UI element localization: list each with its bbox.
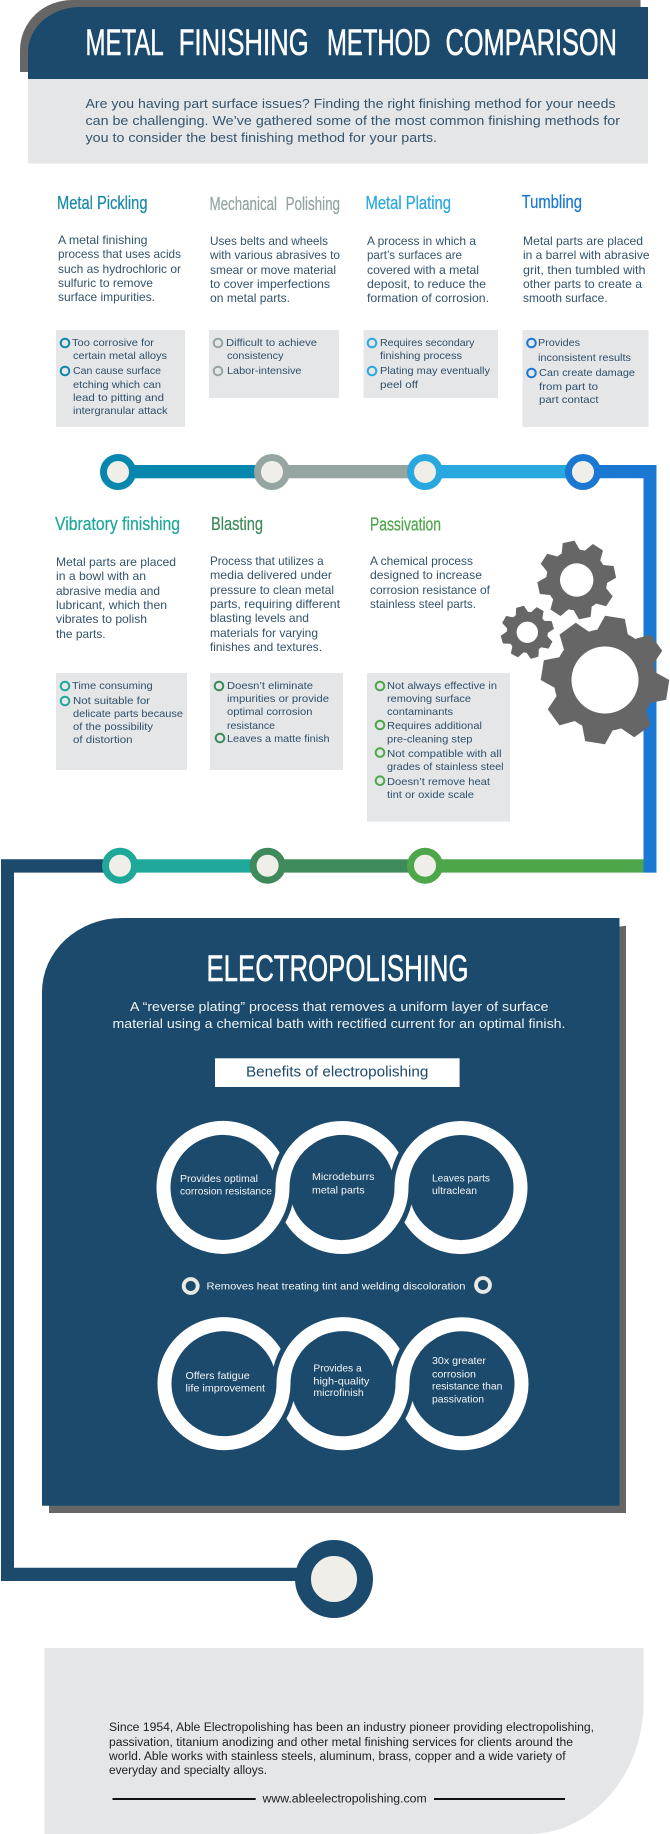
panel: blasting: materials for varying (210, 626, 318, 640)
panel: mechanical polishing: Mechanical (210, 194, 277, 214)
panel: tumbling: smooth surface. (523, 291, 608, 305)
panel: metal pickling: etching which can (73, 379, 161, 391)
panel: blasting: Leaves a matte finish (227, 733, 330, 745)
panel: passivation: tint or oxide scale (387, 789, 474, 801)
timeline: upper connector (104, 458, 656, 873)
panel: passivation: pre-cleaning step (387, 734, 473, 746)
panel: passivation: grades of stainless steel (387, 761, 504, 773)
panel: metal plating: covered with a metal (367, 263, 479, 277)
benefit rings: row 2: Offers fatigue (186, 1370, 250, 1382)
panel: passivation (367, 514, 510, 822)
title: FINISHING (179, 22, 309, 63)
panel: vibratory finishing: of the possibility (73, 721, 154, 733)
panel: metal pickling: surface impurities. (58, 290, 155, 304)
panel: metal plating: peel off (380, 379, 418, 391)
panel: metal pickling (56, 193, 185, 427)
panel: tumbling: inconsistent results (538, 352, 631, 364)
panel: header (20, 0, 648, 79)
panel: vibratory finishing: delicate parts because (73, 708, 183, 720)
panel: footer: everyday and specialty alloys. (109, 1765, 267, 1777)
panel: blasting: blasting levels and (210, 611, 309, 625)
panel: vibratory finishing: of distortion (73, 734, 133, 746)
panel: metal pickling: Too corrosive for (72, 337, 155, 349)
panel: intro: Are you having part surface issues? Finding the right finishing method for your needs (86, 96, 616, 111)
panel: blasting: impurities or provide (227, 693, 329, 705)
panel: blasting: resistance (227, 720, 275, 732)
benefit rings: row 2: resistance than (432, 1380, 503, 1392)
benefit rings: row 1: Microdeburrs (312, 1171, 374, 1183)
panel: blasting: media delivered under (210, 568, 332, 582)
panel: passivation: Passivation (370, 514, 441, 534)
panel: footer: Since 1954, Able Electropolishing has been an industry pioneer providing electropolishing, (109, 1722, 594, 1734)
panel: footer (44, 1648, 644, 1834)
panel: tumbling: from part to (539, 381, 598, 393)
title: METHOD (327, 22, 430, 63)
benefit rings: row 2: 30x greater (432, 1355, 487, 1367)
benefits label (215, 1058, 460, 1087)
panel: metal pickling: certain metal alloys (73, 350, 167, 362)
panel: mechanical polishing: Polishing (286, 194, 340, 214)
benefit rings: row 2: microfinish (313, 1387, 364, 1399)
panel: vibratory finishing: lubricant, which then (56, 598, 167, 612)
panel: metal plating: Requires secondary (380, 337, 475, 349)
panel: vibratory finishing: Vibratory finishing (55, 514, 180, 534)
panel: passivation: Requires additional (387, 720, 482, 732)
panel: tumbling: part contact (539, 394, 599, 406)
panel: metal plating (364, 193, 498, 398)
panel: mechanical polishing: to cover imperfections (210, 277, 330, 291)
panel: intro: you to consider the best finishing method for your parts. (86, 130, 437, 145)
panel: footer: www.ableelectropolishing.com (261, 1793, 427, 1805)
panel: passivation: Doesn’t remove heat (387, 776, 490, 788)
panel: mechanical polishing: smear or move material (210, 263, 336, 277)
panel: passivation: corrosion resistance of (370, 583, 491, 597)
panel: metal plating: Plating may eventually (380, 365, 491, 377)
benefit rings: row 2 (165, 1324, 522, 1443)
benefit rings: row 2: passivation (432, 1393, 484, 1405)
panel: metal pickling: such as hydrochloric or (58, 262, 181, 276)
panel: tumbling: other parts to create a (523, 277, 642, 291)
panel: vibratory finishing (55, 514, 187, 770)
panel: metal plating: part’s surfaces are (367, 248, 462, 262)
panel: vibratory finishing: Time consuming (72, 680, 153, 692)
panel: mechanical polishing: Labor-intensive (227, 365, 302, 377)
panel: mechanical polishing: consistency (227, 350, 284, 362)
benefits label: Benefits of electropolishing (246, 1065, 428, 1081)
electropolishing description: A “reverse plating” process that removes a uniform layer of surface (130, 1000, 549, 1014)
panel: tumbling: Metal parts are placed (523, 234, 643, 248)
panel: footer: world. Able works with stainless steels, aluminum, brass, copper and a wide variety of (108, 1751, 566, 1763)
benefit rings: row 2: life improvement (186, 1382, 265, 1394)
benefit rings: row 2: Provides a (313, 1362, 362, 1374)
panel: metal pickling: A metal finishing (58, 233, 148, 247)
benefit rings: row 1: Leaves parts (432, 1172, 490, 1184)
panel: footer: passivation, titanium anodizing and other metal finishing services for clients around the (109, 1737, 573, 1749)
panel: blasting: optimal corrosion (227, 706, 313, 718)
panel: passivation: Not compatible with all (387, 748, 502, 760)
panel: mechanical polishing (209, 194, 340, 398)
panel: passivation: A chemical process (370, 554, 473, 568)
panel: blasting: Doesn’t eliminate (227, 680, 313, 692)
benefit rings: row 2: corrosion (432, 1368, 476, 1380)
panel: passivation: removing surface (387, 693, 471, 705)
panel: blasting (210, 514, 343, 770)
panel: tumbling: Provides (538, 337, 580, 349)
benefit: removes heat tint: Removes heat treating tint and welding discoloration (206, 1280, 466, 1292)
benefit rings: row 1: metal parts (312, 1184, 365, 1196)
electropolishing description: material using a chemical bath with rectified current for an optimal finish. (112, 1017, 566, 1031)
panel: passivation: designed to increase (370, 568, 482, 582)
panel: metal plating: Metal Plating (366, 193, 451, 213)
panel: electropolishing (42, 918, 626, 1513)
benefit rings: row 2: high-quality (313, 1375, 370, 1387)
panel: vibratory finishing: abrasive media and (56, 584, 160, 598)
panel: blasting: Blasting (211, 514, 263, 534)
panel: mechanical polishing: with various abrasives to (209, 248, 340, 262)
title (86, 22, 617, 63)
title: METAL (86, 22, 164, 63)
benefit rings: row 1: corrosion resistance (180, 1185, 272, 1197)
panel: metal pickling: intergranular attack (73, 405, 168, 417)
panel: intro (28, 79, 648, 164)
electropolishing description (112, 1000, 566, 1031)
panel: blasting: Process that utilizes a (210, 554, 324, 568)
panel: metal pickling: lead to pitting and (73, 392, 164, 404)
panel: mechanical polishing: Difficult to achieve (226, 337, 317, 349)
panel: tumbling: Can create damage (539, 367, 635, 379)
benefit rings: row 1 (164, 1128, 520, 1247)
panel: passivation: Not always effective in (387, 680, 497, 692)
panel: blasting: parts, requiring different (210, 597, 341, 611)
timeline: lower connector (1, 851, 644, 1610)
panel: metal plating: finishing process (380, 350, 462, 362)
panel: vibratory finishing: in a bowl with an (56, 569, 146, 583)
panel: mechanical polishing: Uses belts and wheels (210, 234, 328, 248)
panel: metal pickling: process that uses acids (58, 247, 181, 261)
panel: tumbling: Tumbling (522, 192, 582, 212)
panel: metal pickling: sulfuric to remove (58, 276, 153, 290)
panel: passivation: contaminants (387, 706, 453, 718)
panel: tumbling: in a barrel with abrasive (523, 248, 650, 262)
panel: intro: can be challenging. We’ve gathered some of the most common finishing methods for (86, 113, 621, 128)
panel: metal plating: A process in which a (367, 234, 476, 248)
panel: tumbling (522, 192, 650, 427)
benefit rings: row 1: Provides optimal (180, 1173, 258, 1185)
panel: vibratory finishing: the parts. (56, 627, 106, 641)
panel: metal pickling: Can cause surface (73, 365, 161, 377)
panel: metal pickling: Metal Pickling (57, 193, 148, 213)
panel: metal plating: deposit, to reduce the (367, 277, 486, 291)
panel: tumbling: grit, then tumbled with (523, 263, 646, 277)
panel: metal plating: formation of corrosion. (367, 291, 489, 305)
panel: passivation: stainless steel parts. (370, 597, 476, 611)
panel: vibratory finishing: vibrates to polish (56, 612, 147, 626)
panel: blasting: finishes and textures. (210, 640, 322, 654)
heading: electropolishing: ELECTROPOLISHING (206, 948, 468, 989)
panel: mechanical polishing: on metal parts. (210, 291, 290, 305)
panel: vibratory finishing: Metal parts are placed (56, 555, 176, 569)
benefit rings: row 1: ultraclean (432, 1185, 477, 1197)
benefit: removes heat tint (184, 1278, 490, 1293)
icon: gears (500, 540, 670, 745)
panel: blasting: pressure to clean metal (210, 583, 334, 597)
panel: vibratory finishing: Not suitable for (73, 695, 151, 707)
